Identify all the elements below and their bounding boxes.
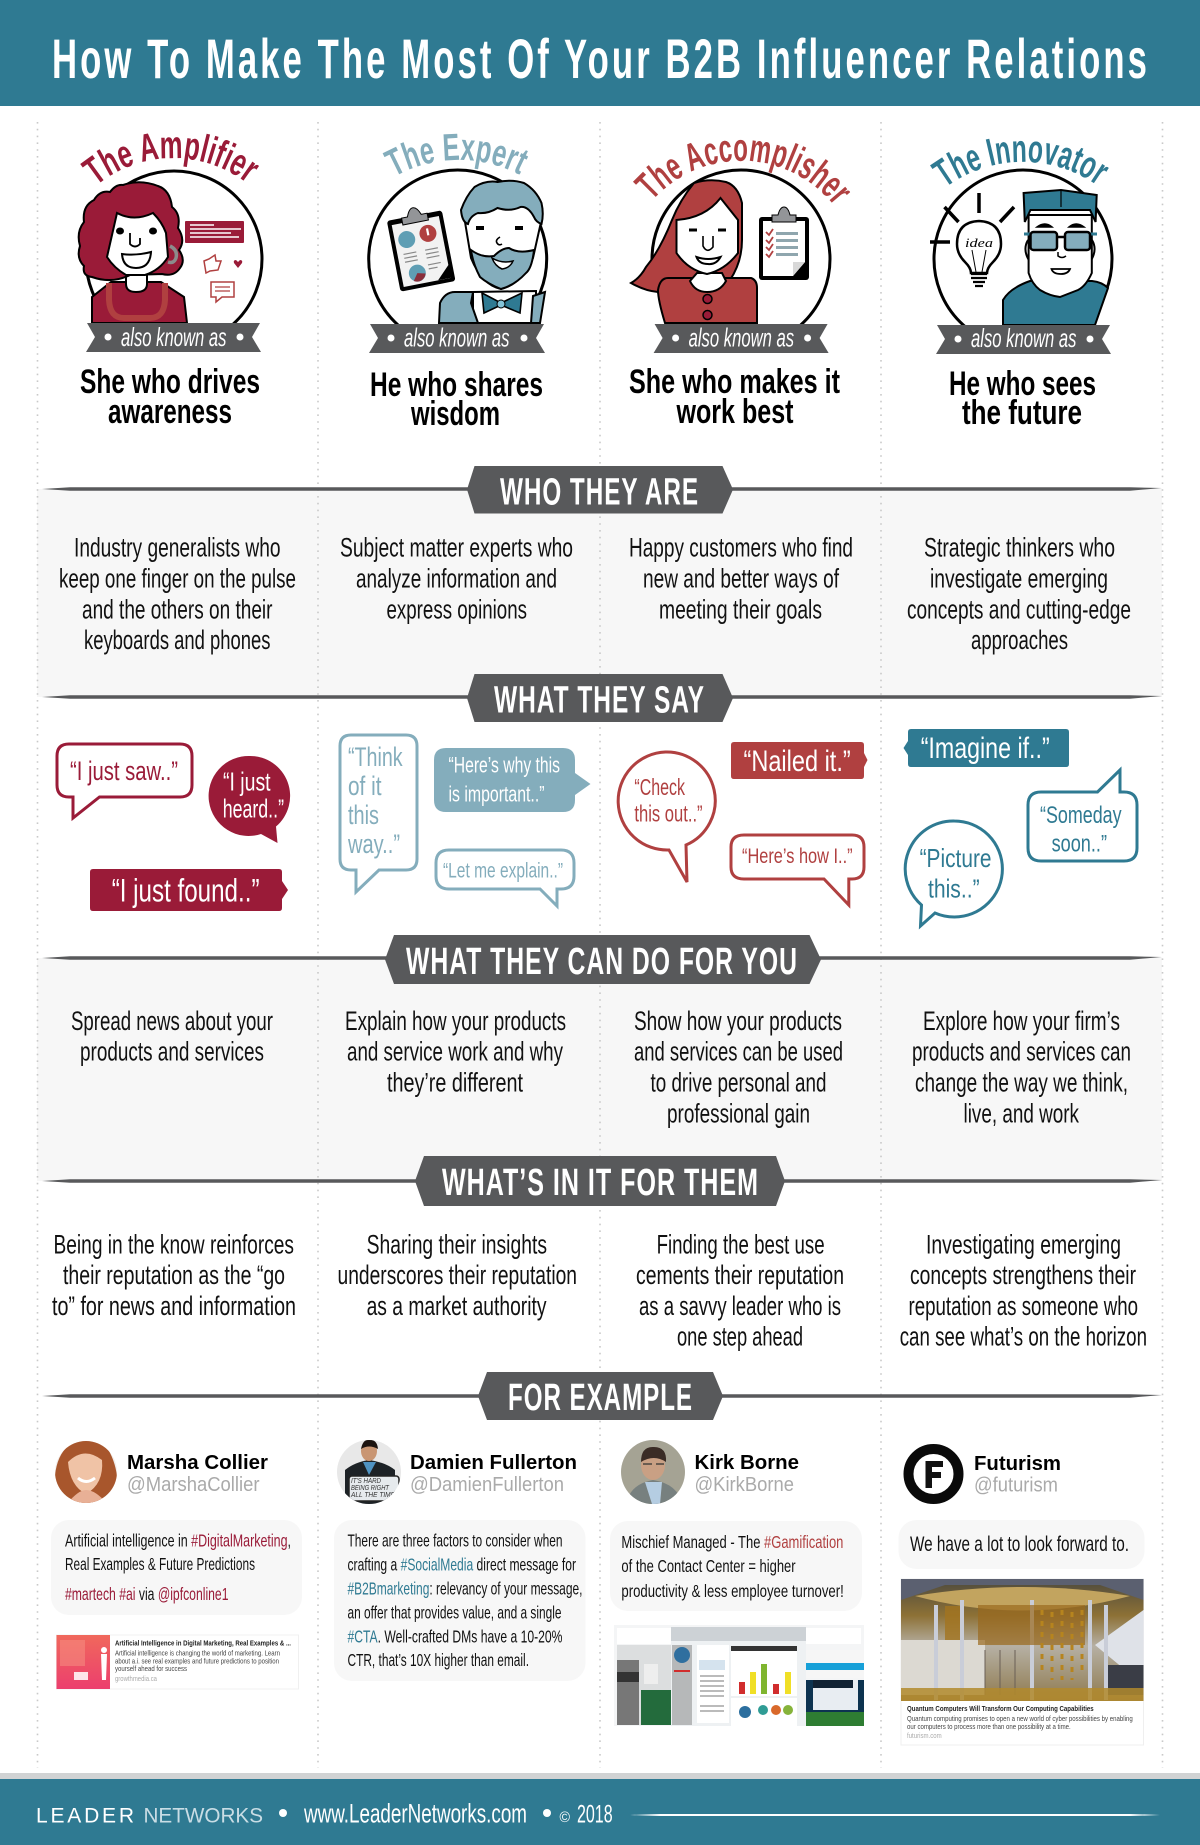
name and handle [410,1452,577,1496]
also known as ribbon: also known as [121,322,226,352]
text block: what they can do: Explore how your firm’s [923,1006,1120,1036]
tweet text bubble: CTR, that’s 10X higher than email. [348,1650,529,1670]
tweet text bubble: productivity & less employee turnover! [621,1581,844,1601]
text block: what's in it for them: Sharing their insights [367,1229,547,1259]
tagline: work best [676,393,794,431]
speech bubbles: amplifier: heard..” [223,794,284,824]
text block: who they are: Happy customers who find [629,533,853,563]
avatar: Futurism logo [908,1449,958,1499]
name and handle: @MarshaCollier [127,1474,260,1496]
tagline: the future [962,394,1082,432]
name and handle: @DamienFullerton [410,1474,564,1496]
innovator name arc: The Innovator [930,138,1109,185]
tweet: Marsha Collier [51,1439,302,1689]
speech bubbles: innovator: “Picture [920,843,992,873]
persona: The Expert [367,134,548,433]
text block: what's in it for them: Investigating emerging [926,1229,1121,1259]
tweet text bubble: an offer that provides value, and a single [348,1602,562,1622]
link card: yourself ahead for success [115,1664,187,1673]
speech bubbles: accomplisher: “Here’s how I..” [742,845,853,868]
tweet text bubble: #B2Bmarketing: relevancy of your message, [348,1578,582,1598]
dashboard screenshots [614,1625,864,1726]
avatar: Damien Fullerton [337,1440,401,1504]
text block: who they are: investigate emerging [930,563,1108,593]
link card [56,1635,298,1689]
tagline [629,363,840,431]
speech bubbles: innovator: this..” [928,874,980,904]
accomplisher name arc: The Accomplisher [633,140,850,203]
avatar: Damien Fullerton: ALL THE TIME [350,1492,395,1499]
tweet text bubble: #martech #ai via @ipfconline1 [65,1584,228,1604]
name and handle [127,1452,268,1496]
tagline: awareness [108,393,232,431]
section heading: WHO THEY ARE: WHO THEY ARE [500,472,699,514]
text block: what they can do: Spread news about your [71,1006,273,1036]
also known as ribbon: also known as [404,322,510,352]
text block: who they are: Strategic thinkers who [924,533,1115,563]
section heading: WHAT THEY CAN DO FOR YOU [42,935,1162,984]
tweet text bubble: Real Examples & Future Predictions [65,1554,255,1574]
name and handle: Marsha Collier [127,1452,268,1474]
speech bubbles: expert [340,735,590,906]
Leader Networks logotype: NETWORKS [144,1805,263,1828]
text block: what's in it for them: cements their reputation [636,1260,844,1290]
avatar: Damien Fullerton: BEING RIGHT [351,1485,390,1492]
quantum computer link card: Quantum computing promises to open a new world of cyber possibilities by enabling [907,1714,1133,1723]
text block: what they can do: to drive personal and [650,1068,826,1098]
also known as ribbon [936,323,1111,354]
persona: The Amplifier [78,134,264,431]
text block: who they are [59,533,1131,655]
text block: what they can do: live, and work [964,1099,1079,1129]
tagline: She who drives [80,363,260,401]
copyright: © [560,1809,570,1826]
name and handle: Futurism [974,1453,1061,1475]
quantum computer link card: Quantum Computers Will Transform Our Computing Capabilities [907,1704,1094,1713]
name and handle: @futurism [974,1475,1058,1497]
text block: what's in it for them: as a market authority [367,1291,547,1321]
tweet text bubble [898,1520,1144,1569]
section heading: WHAT'S IN IT FOR THEM [42,1156,1162,1206]
text block: who they are: meeting their goals [659,594,822,624]
speech bubbles: innovator: “Imagine if..” [921,732,1050,765]
text block: what they can do: products and services [80,1037,264,1067]
text block: who they are: keyboards and phones [84,625,270,655]
tweet text bubble: Artificial intelligence in #DigitalMarketing, [65,1531,291,1551]
text block: what's in it for them: to” for news and information [52,1291,296,1321]
tweet text bubble [610,1521,862,1611]
speech bubbles: innovator [904,729,1137,926]
speech bubbles: amplifier [57,744,290,911]
speech bubbles: accomplisher [618,742,868,905]
copyright: 2018 [577,1801,613,1829]
speech bubbles: accomplisher: “Nailed it.” [744,745,851,778]
tweet: Futurism [898,1449,1144,1745]
speech bubbles: accomplisher: “Check [634,774,685,800]
tweet text bubble: crafting a #SocialMedia direct message for [348,1555,576,1575]
header banner [0,0,1200,106]
quantum computer link card: futurism.com [907,1731,942,1740]
name and handle [974,1453,1061,1497]
amplifier name arc: The Amplifier [80,134,259,182]
tagline [949,365,1096,432]
text block: what's in it for them [52,1229,1147,1352]
avatar: Kirk Borne [620,1440,686,1504]
speech bubbles: amplifier: “I just found..” [112,873,260,909]
text block: what they can do: and service work and why [347,1037,563,1067]
also known as ribbon [369,322,545,353]
avatar: Damien Fullerton: IT'S HARD [351,1478,381,1485]
also known as ribbon: also known as [689,322,794,352]
text block: who they are: Industry generalists who [74,533,280,563]
name and handle: @KirkBorne [694,1474,794,1496]
copyright [560,1801,613,1829]
speech bubbles: expert: of it [348,771,382,801]
section heading: FOR EXAMPLE: FOR EXAMPLE [508,1377,693,1419]
text block: who they are: and the others on their [82,594,273,624]
speech bubbles: amplifier: “I just saw..” [70,756,178,786]
section heading: FOR EXAMPLE [42,1372,1162,1420]
link card: Artificial intelligence is changing the world of marketing. Learn [115,1649,280,1658]
text block: what they can do [71,1006,1131,1129]
tweet: Kirk Borne [610,1440,864,1726]
expert name arc: The Expert [382,134,528,174]
tagline: He who shares [370,366,543,404]
text block: what they can do: professional gain [667,1099,810,1129]
section heading: WHAT THEY SAY: WHAT THEY SAY [494,680,705,722]
Leader Networks logotype [36,1805,263,1828]
tagline: He who sees [949,365,1096,403]
icon: idea light bulb: idea [965,235,994,250]
text block: who they are: analyze information and [356,563,557,593]
text block: what they can do: they’re different [387,1068,523,1098]
speech bubbles: amplifier: “I just [223,767,271,797]
link card: about a.i. see real examples and future predictions to position [115,1656,279,1665]
section heading: WHAT THEY CAN DO FOR YOU: WHAT THEY CAN DO FOR YOU [406,941,798,983]
link card: growthmedia.ca [115,1674,158,1683]
speech bubbles: expert: “Think [348,742,403,772]
tweet text bubble: #CTA. Well-crafted DMs have a 10-20% [348,1626,562,1646]
speech bubbles: expert: “Here’s why this [448,753,560,778]
tagline [370,366,543,433]
text block: what's in it for them: one step ahead [677,1322,803,1352]
name and handle: Kirk Borne [694,1452,799,1474]
text block: what's in it for them: Being in the know reinforces [54,1229,294,1259]
link card: Artificial Intelligence in Digital Marketing, Real Examples & ... [115,1639,291,1648]
section heading: WHAT THEY SAY [42,674,1162,722]
tweet text bubble [334,1520,586,1681]
speech bubbles: expert: is important..” [448,782,544,807]
text block: what's in it for them: their reputation as the “go [63,1260,285,1290]
footer [0,1773,1200,1845]
website: www.LeaderNetworks.com [303,1799,527,1829]
name and handle [694,1452,799,1496]
tweet text bubble: There are three factors to consider when [348,1531,562,1551]
name and handle: Damien Fullerton [410,1452,577,1474]
text block: what's in it for them: underscores their reputation [338,1260,577,1290]
tweet text bubble [51,1520,302,1615]
quantum computer link card: our computers to process more than one possibility at a time. [907,1722,1071,1731]
text block: what they can do: and services can be used [634,1037,843,1067]
tagline: wisdom [410,395,500,433]
text block: what's in it for them: Finding the best use [657,1229,825,1259]
text block: who they are: new and better ways of [643,563,839,593]
icon: idea light bulb [930,193,1014,286]
persona: The Innovator [930,138,1114,432]
text block: who they are: keep one finger on the pulse [59,563,296,593]
speech bubbles: innovator: soon..” [1052,831,1107,858]
persona: The Accomplisher [629,140,850,431]
also known as ribbon [654,322,829,353]
also known as ribbon: also known as [971,323,1076,353]
speech bubbles: expert: way..” [347,829,400,859]
Leader Networks logotype: LEADER [36,1805,134,1828]
section heading: WHAT'S IN IT FOR THEM: WHAT’S IN IT FOR THEM [442,1162,759,1204]
text block: what they can do: Show how your products [634,1006,842,1036]
text block: who they are: Subject matter experts who [340,533,573,563]
speech bubbles: innovator: “Someday [1040,802,1122,829]
section heading: WHO THEY ARE [42,466,1162,514]
text block: what they can do: Explain how your products [345,1006,566,1036]
avatar: Marsha Collier [54,1439,118,1505]
tweet text bubble: of the Contact Center = higher [621,1556,796,1576]
tagline [80,363,260,431]
text block: who they are: express opinions [386,594,527,624]
icon: checklist clipboard [759,207,809,280]
text block: what's in it for them: as a savvy leader who is [639,1291,841,1321]
icon: clipboard with report [385,202,456,292]
speech bubbles: accomplisher: this out..” [634,801,703,827]
text block: who they are: approaches [971,625,1068,655]
tweet text bubble: Mischief Managed - The #Gamification [621,1532,843,1552]
tweet: Damien Fullerton [334,1440,586,1681]
quantum computer link card [901,1579,1144,1745]
speech bubbles: expert: this [348,800,379,830]
speech bubbles: expert: “Let me explain..” [443,860,563,883]
tagline: She who makes it [629,363,840,401]
